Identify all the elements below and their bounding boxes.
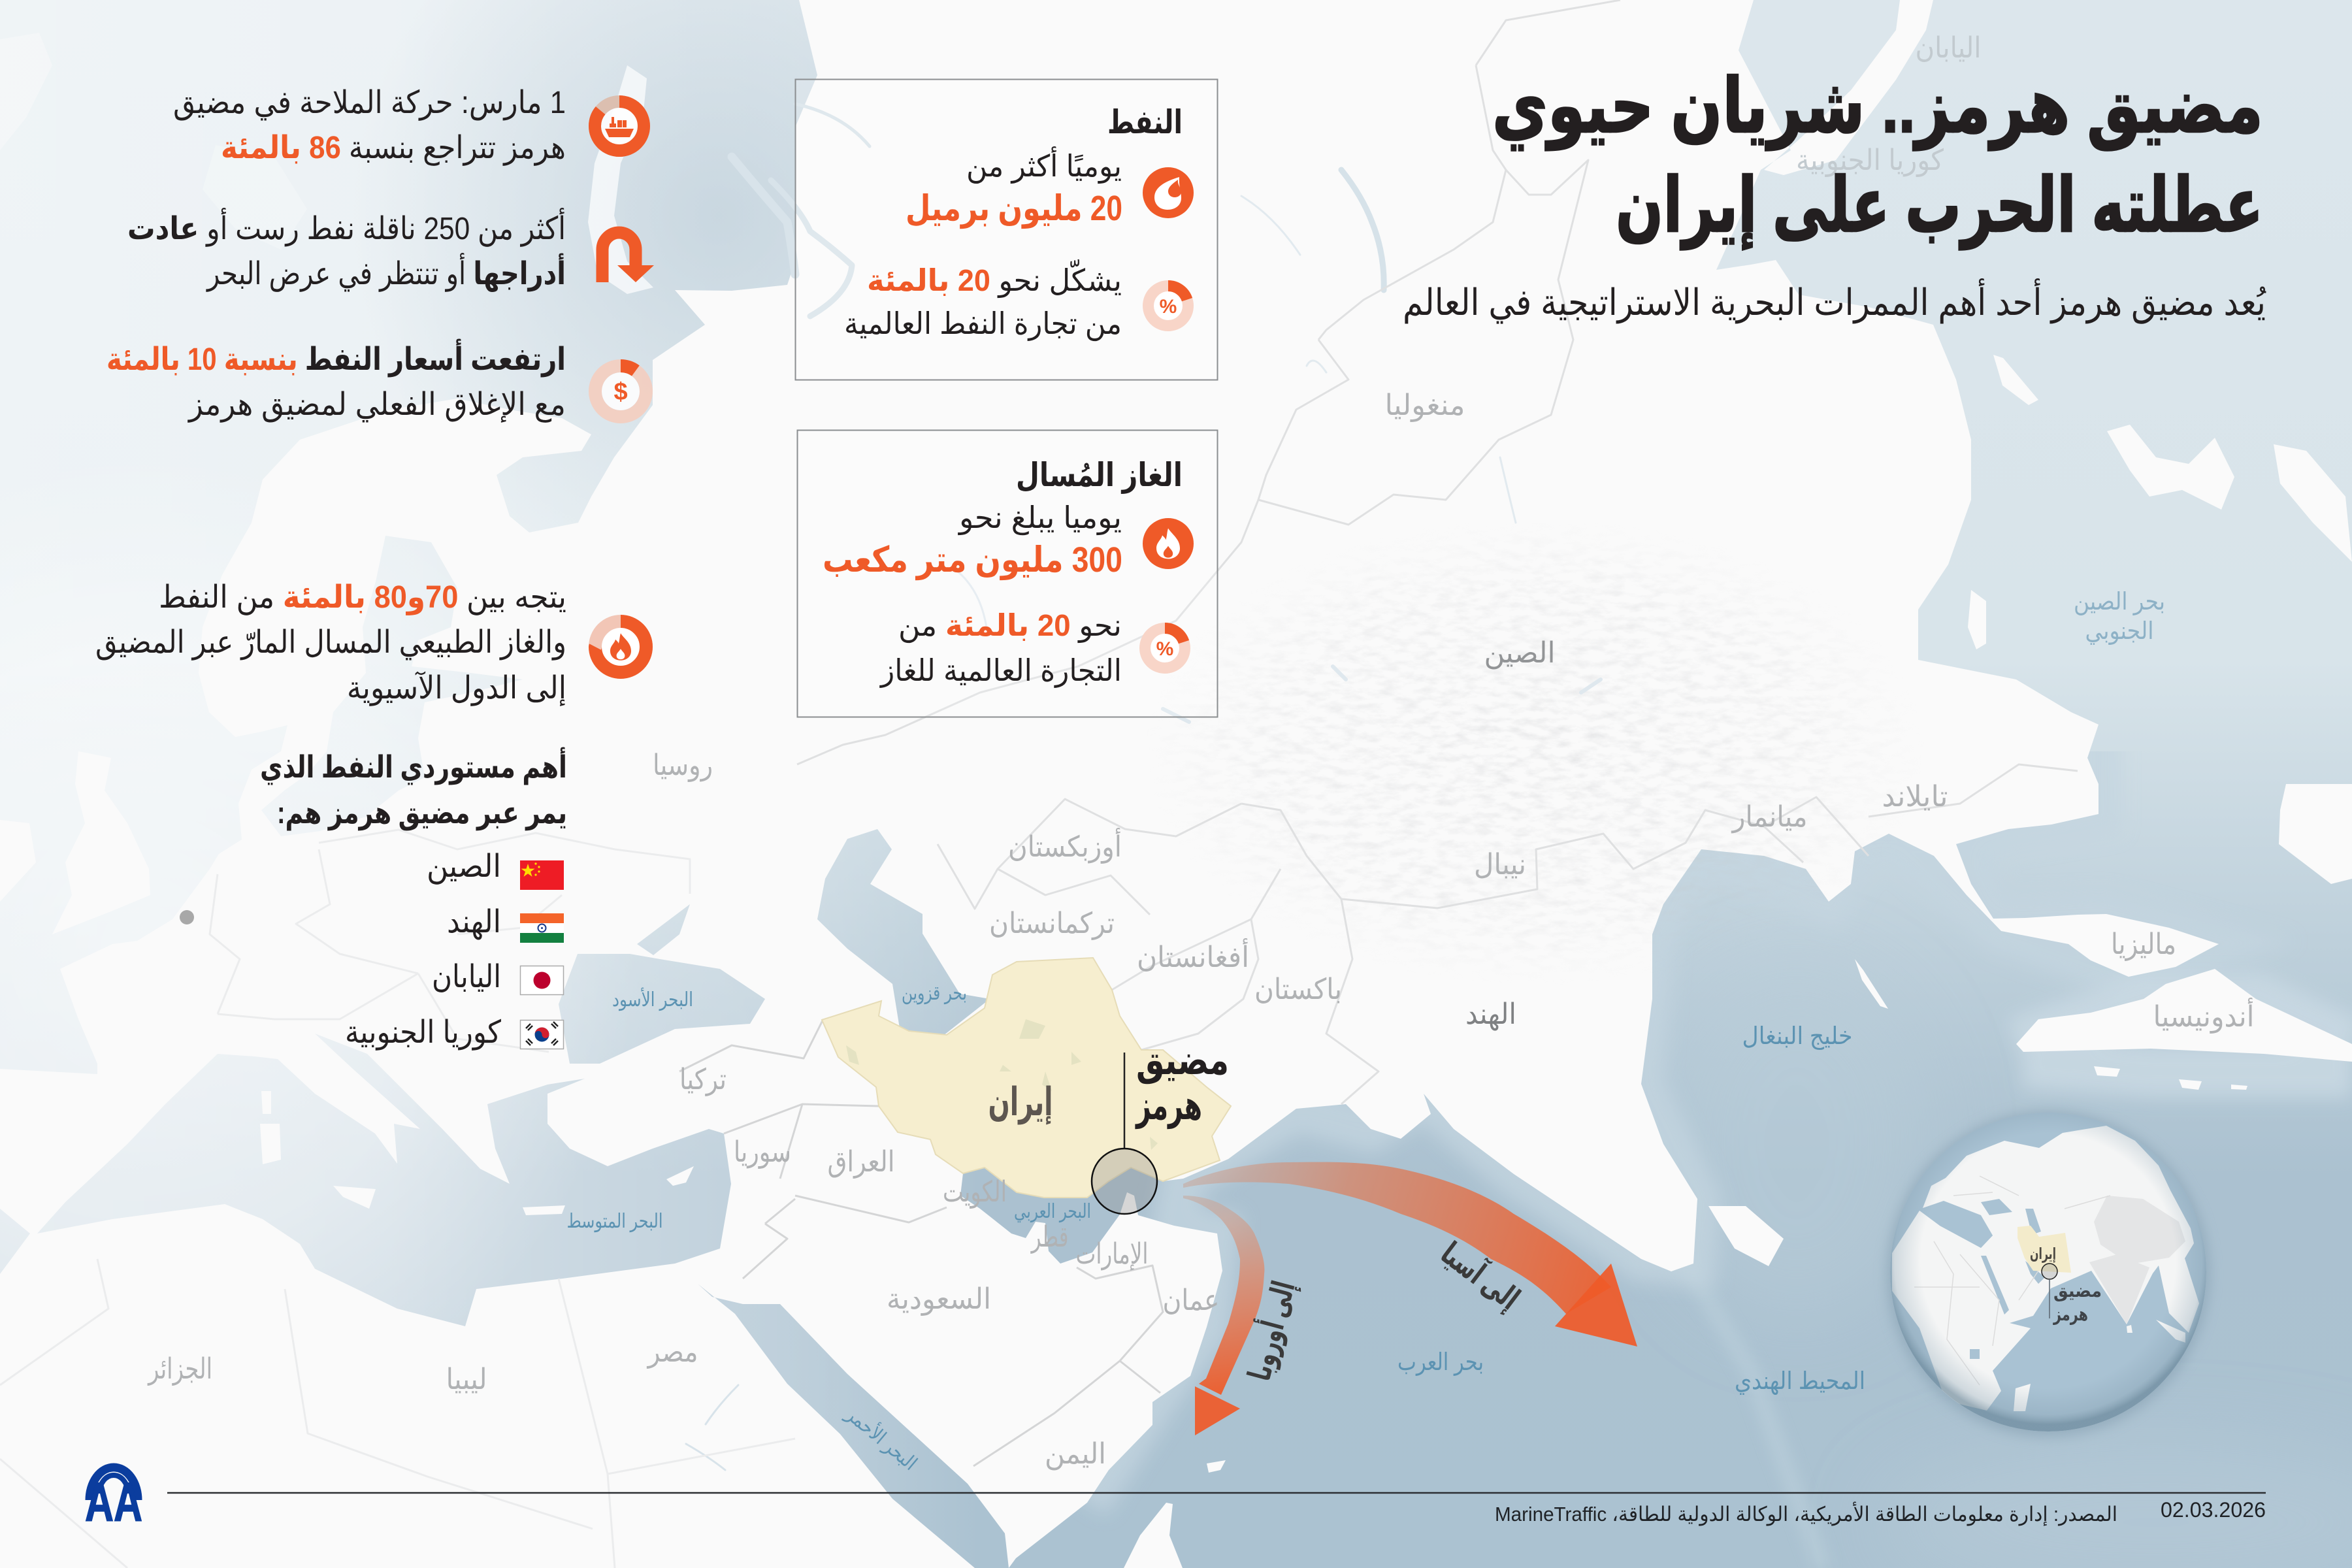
icon: flag of China	[520, 860, 564, 890]
map labels: countries: الصين	[1484, 637, 1555, 670]
icon: flame ring	[595, 621, 646, 672]
icon: percent ring	[1145, 629, 1185, 668]
panel: oil	[796, 80, 1218, 380]
icon: ship ring	[595, 102, 644, 150]
left fact: oil prices: ارتفعت أسعار النفط بنسبة 10 بالمئة	[106, 338, 566, 378]
left fact: Asian share	[95, 580, 646, 706]
left fact: oil prices: مع الإغلاق الفعلي لمضيق هرمز	[188, 387, 566, 423]
map labels: countries: مصر	[647, 1336, 698, 1369]
map labels: countries: نيبال	[1474, 849, 1526, 881]
subtitle: يُعد مضيق هرمز أحد أهم الممرات البحرية الاستراتيجية في العالم	[1403, 278, 2266, 324]
map: Africa and Europe borders	[0, 830, 795, 1568]
map labels: countries: تركيا	[679, 1064, 727, 1096]
icon: dollar ring: $	[613, 378, 628, 406]
importers heading: أهم مستوردي النفط الذي	[260, 747, 567, 785]
map labels: seas: البحر الأسود	[612, 987, 693, 1011]
panel: oil: يشكّل نحو 20 بالمئة	[867, 259, 1122, 299]
importer: China: الصين	[427, 849, 501, 885]
map labels: countries: ليبيا	[446, 1364, 487, 1396]
map labels: countries: الجزائر	[147, 1353, 212, 1386]
map: rivers and lakes	[686, 104, 1601, 1470]
map labels: seas: بحر قزوين	[902, 983, 967, 1005]
map labels: countries: باكستان	[1254, 973, 1342, 1005]
left fact: oil prices	[106, 338, 646, 423]
map labels: Iran and Strait of Hormuz callout: إيران	[988, 1080, 1053, 1125]
left fact: navigation drop	[173, 86, 644, 166]
panel: oil: النفط	[1107, 104, 1183, 140]
left fact: tankers	[127, 208, 654, 292]
map labels: countries: أفغانستان	[1137, 938, 1249, 973]
map: country borders	[797, 0, 2078, 1104]
map labels: countries: قطر	[1030, 1221, 1069, 1254]
importers heading: يمر عبر مضيق هرمز هم:	[277, 795, 567, 831]
map labels: seas: المحيط الهندي	[1735, 1367, 1865, 1395]
icon: gas flame	[1143, 518, 1194, 569]
map labels: Iran and Strait of Hormuz callout	[988, 1038, 1229, 1215]
icon: percent ring: %	[1156, 638, 1173, 660]
logo: AA: AA	[85, 1471, 142, 1533]
left fact: tankers: أكثر من 250 ناقلة نفط رست أو عادت	[127, 208, 566, 247]
importer: China	[427, 849, 564, 890]
importer: Japan: اليابان	[432, 960, 501, 994]
label: to Asia: إلى آسيا	[1434, 1234, 1527, 1317]
map labels: seas: البحر الأحمر	[841, 1401, 923, 1475]
icon: oil drop	[1143, 167, 1194, 218]
source line: المصدر: إدارة معلومات الطاقة الأمريكية، الوكالة الدولية للطاقة، MarineTraffic	[1495, 1501, 2117, 1526]
map: Iran highlighted	[822, 958, 1231, 1198]
map: Middle East borders	[679, 1019, 1163, 1466]
map labels: countries: سوريا	[734, 1136, 791, 1169]
map labels: countries: اليمن	[1045, 1438, 1106, 1471]
left fact: navigation drop: 1 مارس: حركة الملاحة في مضيق	[173, 86, 566, 121]
title	[1492, 63, 2263, 250]
map labels: seas: الجنوبي	[2085, 617, 2153, 645]
map labels: countries: أندونيسيا	[2153, 998, 2254, 1034]
icon: flag of India	[520, 913, 564, 943]
icon: dollar ring	[595, 366, 646, 417]
grey city dot	[180, 910, 194, 924]
arrow: to Europe	[1183, 1196, 1264, 1435]
left fact: Asian share: والغاز الطبيعي المسال المارّ عبر المضيق	[95, 625, 566, 661]
icon: percent ring: %	[1160, 296, 1177, 318]
importer: India	[447, 905, 564, 943]
map labels: seas: بحر العرب	[1397, 1348, 1484, 1376]
map labels: countries: السعودية	[887, 1283, 991, 1316]
logo: AA	[85, 1467, 142, 1533]
footer rule	[167, 1492, 2266, 1494]
globe locator: مضيق	[2053, 1281, 2102, 1301]
importer: South Korea: كوريا الجنوبية	[345, 1015, 501, 1051]
map labels: countries: عمان	[1163, 1284, 1219, 1316]
map labels: countries: تركمانستان	[989, 907, 1115, 940]
importer: India: الهند	[447, 905, 501, 940]
panel: oil: يوميًا أكثر من	[966, 146, 1122, 184]
panel: oil: من تجارة النفط العالمية	[844, 306, 1122, 342]
label: to Europe: إلى أوروبا	[1239, 1277, 1303, 1384]
panel: liquefied gas: التجارة العالمية للغاز	[879, 653, 1122, 688]
panel: liquefied gas: يوميا يبلغ نحو	[958, 500, 1122, 536]
map labels: countries: الهند	[1465, 998, 1516, 1031]
panel: oil: 20 مليون برميل	[906, 189, 1122, 229]
map labels: seas: خليج البنغال	[1742, 1022, 1853, 1050]
date: 02.03.2026	[2161, 1498, 2266, 1522]
map labels: countries: منغوليا	[1385, 389, 1465, 422]
map labels: Iran and Strait of Hormuz callout: مضيق	[1136, 1038, 1229, 1084]
map labels: countries: العراق	[827, 1146, 895, 1179]
left fact: tankers: أدراجها أو تنتظر في عرض البحر	[206, 253, 566, 292]
map labels: countries: اليابان	[1916, 32, 1981, 64]
map labels: countries: أوزبكستان	[1008, 828, 1122, 864]
map labels: Iran and Strait of Hormuz callout: هرمز	[1135, 1083, 1202, 1129]
map labels: countries: ماليزيا	[2111, 928, 2176, 961]
panel: liquefied gas: الغاز المُسال	[1016, 457, 1183, 494]
icon: U-turn arrow	[602, 233, 654, 282]
map labels: seas: البحر المتوسط	[567, 1211, 662, 1232]
icon: flag of South Korea	[520, 1021, 563, 1049]
arrow: to Asia	[1183, 1162, 1637, 1347]
map labels: seas: البحر العربي	[1014, 1201, 1091, 1223]
map labels: seas	[567, 588, 2165, 1475]
map labels: countries: كوريا الجنوبية	[1796, 144, 1944, 177]
panel: liquefied gas	[797, 430, 1218, 717]
map: far arctic islands	[0, 33, 653, 294]
map labels: countries: روسيا	[653, 749, 713, 782]
map labels: seas: بحر الصين	[2074, 588, 2165, 615]
map labels: countries: الكويت	[943, 1176, 1007, 1209]
map labels: countries: ميانمار	[1731, 801, 1807, 834]
globe locator: هرمز	[2053, 1304, 2088, 1325]
map: terrain texture	[1254, 576, 1818, 924]
panel: liquefied gas: 300 مليون متر مكعب	[823, 540, 1122, 580]
map labels: countries: تايلاند	[1882, 781, 1948, 813]
importer: Japan	[432, 960, 563, 994]
map labels: countries: الإمارات	[1075, 1238, 1149, 1271]
icon: flag of Japan	[520, 966, 563, 994]
map: coastal shelf glow	[1087, 660, 2352, 1503]
icon: percent ring	[1149, 286, 1188, 325]
panel: liquefied gas: نحو 20 بالمئة من	[898, 608, 1122, 644]
left fact: Asian share: إلى الدول الآسيوية	[347, 670, 566, 706]
left fact: navigation drop: هرمز تتراجع بنسبة 86 بالمئة	[221, 131, 566, 166]
left fact: Asian share: يتجه بين 70و80 بالمئة من النفط	[159, 580, 566, 615]
importers heading	[260, 747, 567, 831]
globe locator	[1882, 1104, 2215, 1437]
globe locator: إيران	[2030, 1245, 2056, 1263]
